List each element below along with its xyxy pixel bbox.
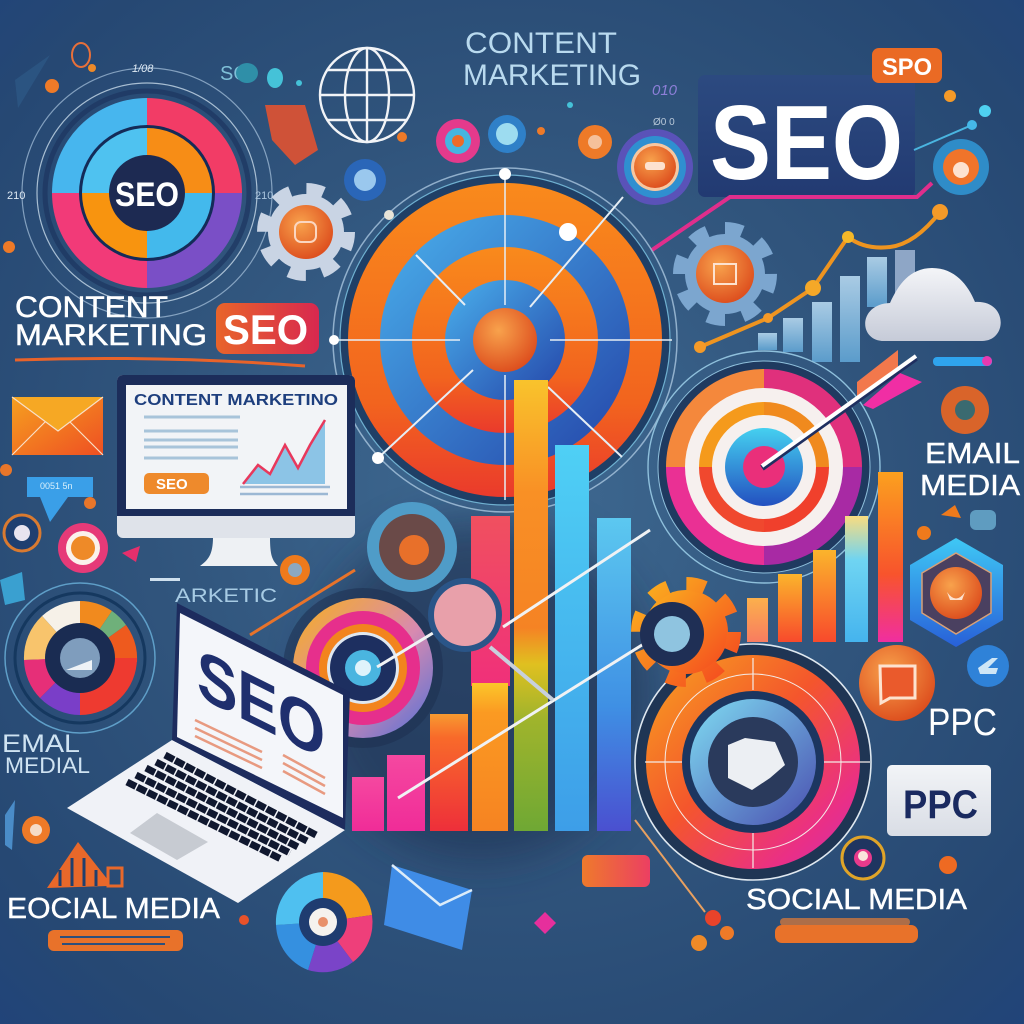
gear icon: left — [264, 190, 348, 274]
label: PPC text: PPC — [928, 702, 997, 744]
donut chart: lower left — [5, 583, 155, 733]
icon: hexagon — [910, 538, 1003, 647]
magnifier circle — [367, 502, 457, 592]
icon: large orange circle: 010 — [652, 82, 678, 99]
icon: building chart — [5, 800, 122, 888]
card: PPC — [887, 765, 991, 836]
badge: SPO — [872, 48, 942, 83]
icon: chat bubble circle — [859, 645, 935, 721]
donut chart: SEO: 210 — [7, 190, 25, 202]
monitor: content marketing — [117, 375, 355, 566]
label: email media left — [2, 730, 90, 778]
gear icon: top-right — [681, 230, 769, 318]
icon: cloud — [865, 268, 1001, 341]
donut chart: SEO — [7, 63, 273, 318]
top-left decorative icons: SO — [220, 63, 249, 85]
heading: content marketing top: MARKETING — [463, 59, 641, 92]
top row circular icons — [344, 102, 612, 201]
right target with arrow — [648, 350, 922, 583]
faint marketing text: ARKETIC — [175, 586, 277, 607]
laptop: SEO — [197, 633, 325, 775]
label: email media right: EMAIL — [925, 438, 1020, 470]
rainbow target: lower middle — [250, 570, 443, 748]
icon: globe — [320, 48, 414, 142]
central target — [329, 168, 677, 512]
dark glow behind charts — [310, 520, 650, 860]
icon: orange envelope — [12, 397, 103, 455]
icon: top-right circle — [914, 90, 991, 195]
label: email media left: MEDIAL — [5, 753, 90, 778]
panel: SEO title: SEO — [710, 84, 903, 202]
badge: SEO left: SEO — [223, 306, 308, 353]
lower right target — [635, 644, 871, 912]
top-left decorative icons — [3, 43, 318, 253]
trend lines and magnifying glass — [377, 530, 650, 798]
left small icons — [0, 464, 310, 605]
label: social media left — [7, 893, 249, 951]
panel: SEO title — [652, 75, 932, 250]
badge: SPO: SPO — [882, 54, 932, 81]
icon: large orange circle — [617, 82, 693, 205]
small bar chart right — [747, 472, 903, 642]
heading: content marketing left: CONTENT — [15, 291, 168, 324]
label: social media left: EOCIAL MEDIA — [7, 893, 221, 925]
card: PPC: PPC — [903, 783, 978, 827]
donut chart: bottom — [276, 872, 373, 972]
heading: content marketing left: MARKETING — [15, 319, 207, 352]
monitor: content marketing: SEO — [156, 476, 188, 493]
growth chart: top-right — [694, 204, 948, 362]
main bar chart — [352, 380, 631, 831]
icon: small blue circle — [967, 645, 1009, 687]
donut chart: SEO: SEO — [115, 176, 179, 214]
donut chart: SEO: 1/08 — [132, 63, 154, 75]
donut chart: SEO: 210 — [255, 190, 273, 202]
heading: content marketing top: CONTENT — [465, 27, 617, 60]
label: email media left: EMAL — [2, 730, 80, 758]
decor near email label — [917, 356, 996, 540]
icon: large orange circle: Ø0 0 — [653, 117, 675, 128]
label: social media right: SOCIAL MEDIA — [746, 884, 968, 916]
heading: content marketing left — [15, 291, 305, 366]
label: email media right: MEDIA — [920, 470, 1021, 502]
small bottom-right icons — [534, 837, 957, 951]
left small icons: 0051 5n — [40, 481, 73, 491]
label: social media right — [746, 884, 968, 943]
heading: content marketing top — [463, 27, 641, 92]
label: email media right — [920, 438, 1021, 502]
gear icon: orange — [638, 584, 734, 680]
laptop — [67, 603, 350, 903]
icon: blue envelope — [384, 865, 472, 950]
monitor: content marketing: CONTENT MARKETINO — [134, 392, 338, 409]
